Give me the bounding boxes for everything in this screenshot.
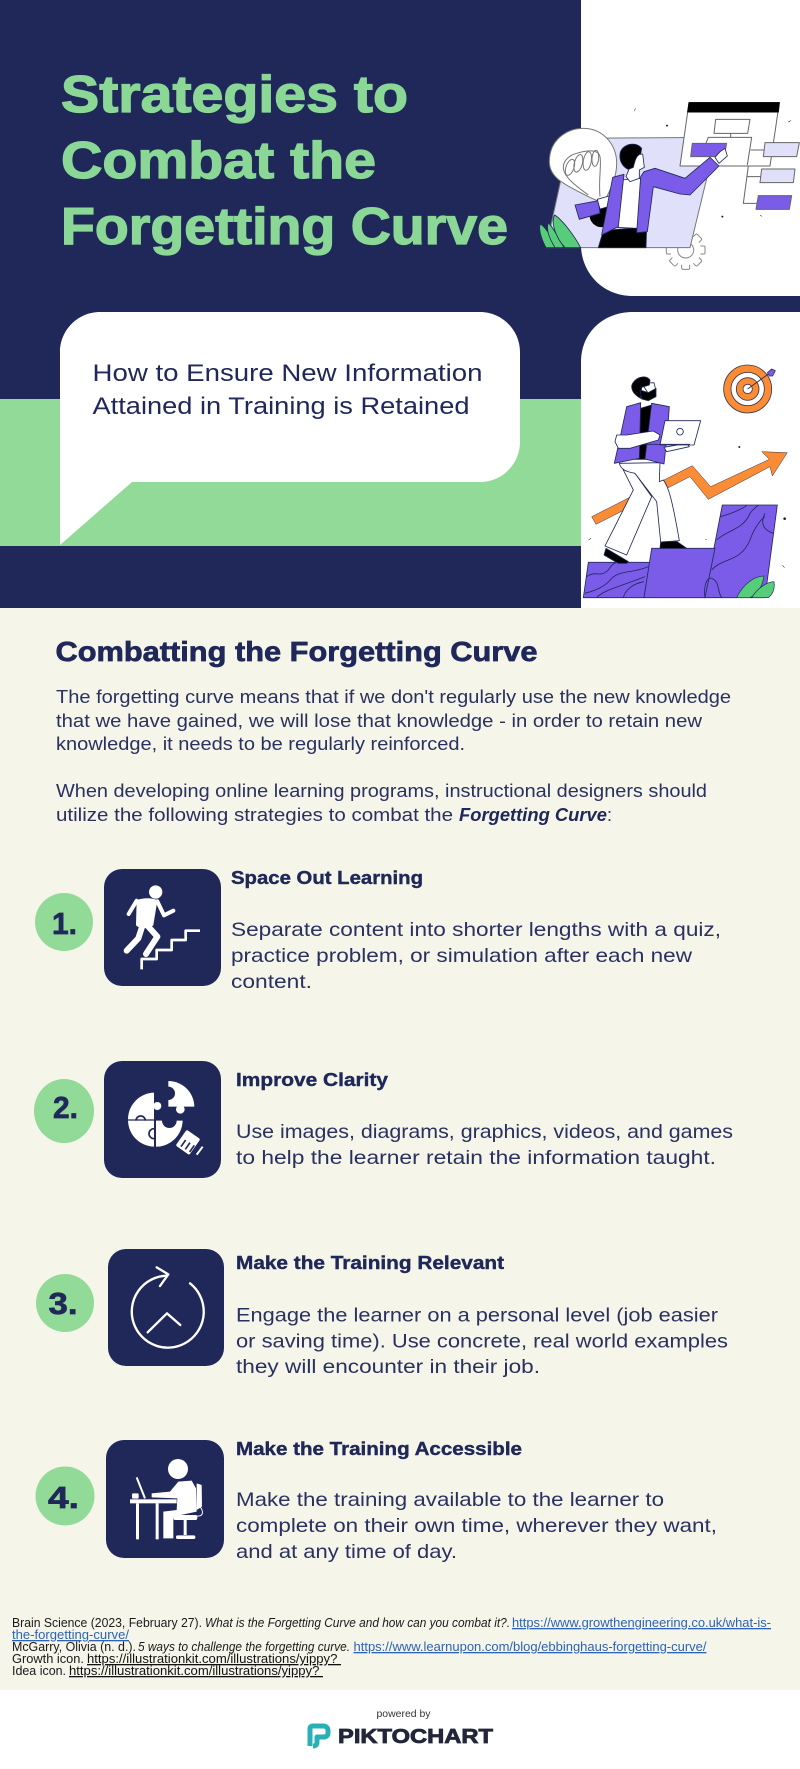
illustration: man with lightbulb and flowchart (534, 103, 799, 269)
leaves (737, 576, 774, 598)
strategy 4: icon person at desk (106, 1440, 224, 1558)
strategy 2: text: Use images, diagrams, graphics, videos, and games (236, 1121, 733, 1143)
strategy 3: text: Make the Training Relevant (236, 1252, 504, 1273)
second paragraph: utilize the following strategies to combat the (56, 805, 453, 825)
second paragraph: Forgetting Curve (459, 805, 607, 825)
strategy 3: text: or saving time). Use concrete, real world examples (236, 1330, 728, 1352)
strategy 3: number badge (36, 1274, 94, 1332)
references: https://illustrationkit.com/illustrations/yippy? (69, 1663, 323, 1678)
title (61, 66, 508, 256)
references: Brain Science (2023, February 27). (12, 1615, 202, 1630)
lavender backdrop (546, 137, 717, 248)
strategy 4: text: Make the Training Accessible (236, 1438, 522, 1459)
lightbulb (549, 128, 617, 227)
references: https://www.growthengineering.co.uk/what-is- (512, 1615, 771, 1630)
growth arrow (592, 452, 787, 524)
leaves (540, 215, 581, 248)
intro paragraph: knowledge, it needs to be regularly reinforced. (56, 734, 465, 754)
title: Strategies to (61, 66, 408, 124)
logo: piktochart: PIKTOCHART (338, 1726, 493, 1748)
strategy 3: text (236, 1252, 728, 1378)
second paragraph (56, 781, 707, 825)
strategy 4: number badge: 4. (48, 1480, 79, 1515)
strategy 2: text: Improve Clarity (236, 1069, 389, 1090)
panel: navy header background (0, 0, 800, 608)
references: https://illustrationkit.com/illustrations/yippy? (87, 1651, 341, 1666)
references: 5 ways to challenge the forgetting curve. (138, 1639, 350, 1654)
intro paragraph: The forgetting curve means that if we don't regularly use the new knowledge (56, 687, 731, 707)
strategy 3: text: Engage the learner on a personal level (job easier (236, 1304, 719, 1326)
references: Idea icon. (12, 1663, 66, 1678)
strategy 3: text: they will encounter in their job. (236, 1356, 540, 1378)
strategy 2: icon puzzle and magnifier (104, 1061, 221, 1178)
speech bubble with subtitle (60, 312, 520, 545)
heading: combatting the forgetting curve: Combatting the Forgetting Curve (56, 636, 538, 667)
powered by: powered by (376, 1708, 431, 1720)
man (575, 144, 727, 248)
strategy 4: text: and at any time of day. (236, 1541, 457, 1563)
strategy 1: text: practice problem, or simulation after each new (231, 945, 693, 967)
strategy 1: text: Space Out Learning (231, 867, 423, 888)
strategy 4: text: complete on their own time, wherever they want, (236, 1515, 717, 1537)
icon: target (724, 365, 775, 413)
strategy 4: number badge (36, 1466, 94, 1526)
specks (534, 108, 791, 218)
panel: top right white panel (581, 0, 800, 296)
second paragraph: : (607, 805, 612, 825)
strategy 2: text (236, 1069, 733, 1169)
strategy 1: text (231, 867, 721, 993)
strategy 2: number badge: 2. (53, 1090, 78, 1125)
intro paragraph: that we have gained, we will lose that knowledge - in order to retain new (56, 711, 703, 731)
flowchart window (680, 103, 799, 209)
title: Combat the (61, 132, 376, 190)
references: the-forgetting-curve/ (12, 1627, 129, 1642)
strategy 4: text: Make the training available to the learner to (236, 1489, 664, 1511)
references (12, 1615, 771, 1678)
intro paragraph (56, 687, 731, 754)
strategy 3: number badge: 3. (48, 1286, 78, 1321)
strategy 1: number badge (35, 893, 93, 951)
strategy 2: text: to help the learner retain the information taught. (236, 1147, 716, 1169)
green band (0, 399, 581, 546)
purple steps (583, 505, 777, 598)
strategy 4: text (236, 1438, 717, 1563)
second paragraph: When developing online learning programs, instructional designers should (56, 781, 707, 801)
references: What is the Forgetting Curve and how can you combat it?. (205, 1615, 510, 1630)
icon: gear (666, 231, 705, 269)
specks (588, 446, 786, 568)
panel: cream content background (0, 608, 800, 1690)
illustration: man climbing steps with growth arrow and target (583, 365, 787, 598)
speech bubble with subtitle: How to Ensure New Information (92, 360, 483, 387)
strategy 1: text: Separate content into shorter lengths with a quiz, (231, 919, 721, 941)
strategy 1: icon person climbing stairs (104, 869, 221, 986)
references: Growth icon. (12, 1651, 84, 1666)
man (604, 377, 701, 563)
panel: lower right white panel (581, 312, 800, 608)
strategy 1: number badge: 1. (52, 906, 77, 941)
references: https://www.learnupon.com/blog/ebbinghaus-forgetting-curve/ (354, 1639, 707, 1654)
strategy 3: icon circular arrow (108, 1249, 224, 1366)
title: Forgetting Curve (61, 198, 508, 256)
speech bubble with subtitle: Attained in Training is Retained (92, 393, 470, 420)
references: McGarry, Olivia (n. d.). (12, 1639, 136, 1654)
strategy 1: text: content. (231, 971, 312, 993)
strategy 2: number badge (34, 1079, 94, 1143)
